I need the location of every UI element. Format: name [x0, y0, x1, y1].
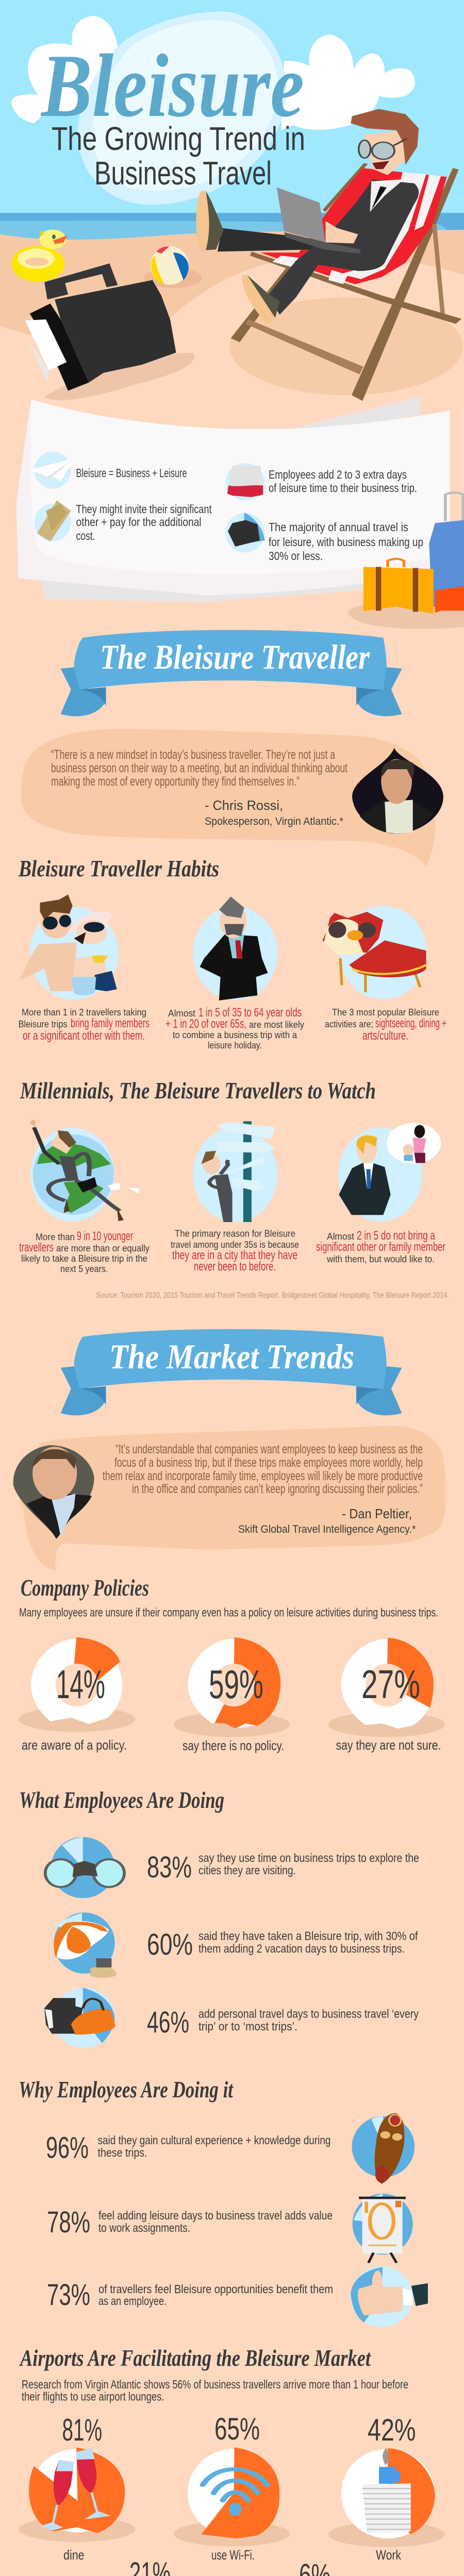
chart: 59% donut: say there is no policy. [183, 1738, 284, 1753]
stat: 46% with bags icon [44, 1988, 419, 2048]
text: habit 3: arts/culture. [362, 1029, 408, 1043]
panel: Chris Rossi quote [21, 729, 443, 867]
stat: 73% with thumbs up icon: 73% [47, 2278, 90, 2312]
text: millennial 2 [171, 1228, 299, 1274]
text: millennial 1: 9 in 10 younger [77, 1229, 133, 1243]
illustration: millennial figures [29, 1119, 441, 1222]
stat: 78% with presentation board icon [47, 2194, 413, 2263]
heading: What Employees Are Doing: What Employees Are Doing [19, 1787, 224, 1813]
heading: Bleisure Traveller Habits: Bleisure Traveller Habits [18, 855, 219, 882]
text: millennial 3: Almost [327, 1231, 354, 1242]
panel: bleisure definition paper: 30% or less. [269, 549, 323, 563]
stat: 73% with thumbs up icon: of travellers feel Bleisure opportunities benefit them [98, 2282, 333, 2296]
stat: 60% with umbrella icon: 60% [147, 1928, 193, 1961]
stat: 46% with bags icon: trip’ or to ‘most trips’. [198, 2020, 297, 2033]
stat: 83% with binoculars icon: 83% [147, 1851, 192, 1884]
text: habit 3: The 3 most popular Bleisure [332, 1007, 439, 1018]
text: millennial 2: travel among under 35s is because [171, 1240, 299, 1250]
banner: The Bleisure Traveller [61, 630, 402, 716]
text: habit 3 [325, 1007, 446, 1043]
heading: Why Employees Are Doing it: Why Employees Are Doing it [19, 2076, 234, 2103]
chart: 42% Work: Work [376, 2547, 402, 2563]
text: millennial 1: More than [36, 1232, 75, 1242]
stat: 78% with presentation board icon: 78% [47, 2206, 90, 2239]
panel: bleisure definition paper: They might invite their significant [76, 502, 212, 516]
text: habit 2: are most likely [249, 1020, 304, 1030]
panel: bleisure definition paper: for leisure, with business making up [269, 535, 423, 549]
text: millennial 1 [19, 1229, 150, 1274]
panel: bleisure definition paper: The majority of annual travel is [269, 520, 408, 534]
icon: luggage pile [347, 493, 464, 629]
stat: 96% with mask icon [46, 2113, 415, 2184]
chart: 27% donut [328, 1638, 445, 1753]
chart: 65% Wi-Fi: use Wi-Fi. [211, 2547, 255, 2563]
stat: 78% with presentation board icon: feel adding leisure days to business travel adds value [98, 2209, 333, 2222]
heading: Airports: Airports Are Facilitating the Bleisure Market [19, 2345, 371, 2371]
panel: Chris Rossi quote: - Chris Rossi, [205, 798, 283, 813]
stat: 78% with presentation board icon: to work assignments. [98, 2221, 190, 2234]
chart: 59% donut: 59% [209, 1662, 263, 1707]
stat: 73% with thumbs up icon: as an employee. [98, 2294, 167, 2308]
title: Bleisure [40, 36, 304, 135]
text: millennial 3: with them, but would like to. [326, 1254, 435, 1264]
chart: 81% dine: dine [63, 2547, 85, 2563]
text: airports intro [22, 2378, 408, 2403]
text: millennial 3: 2 in 5 do not bring a [357, 1229, 435, 1243]
chart: 27% donut: say they are not sure. [336, 1737, 441, 1753]
panel: bleisure definition paper [16, 397, 450, 602]
stat: 60% with umbrella icon: said they have taken a Bleisure trip, with 30% of [198, 1929, 418, 1942]
text: millennial 2: The primary reason for Bleisure [175, 1228, 295, 1239]
stat: 73% with thumbs up icon [47, 2266, 428, 2327]
text: millennial 1: next 5 years. [60, 1264, 108, 1274]
illustration: habit figures [19, 894, 427, 1001]
text: airports intro: their flights to use airport lounges. [22, 2389, 164, 2403]
stat: 46% with bags icon: 46% [147, 2006, 189, 2039]
chart: 42% Work: 42% [368, 2413, 416, 2447]
text: millennial 2: never been to before. [194, 1260, 276, 1274]
panel: Chris Rossi quote: business person on their way to a meeting, but an individual thinking about [51, 761, 347, 775]
text: habit 1: More than 1 in 2 travellers taking [22, 1007, 146, 1018]
stat: 83% with binoculars icon: say they use time on business trips to explore the [198, 1851, 419, 1865]
banner: The Bleisure Traveller: The Bleisure Traveller [100, 637, 370, 676]
title: Business Travel [94, 155, 272, 192]
text: habit 2: leisure holiday. [208, 1040, 262, 1050]
text: millennial 1: are more than or equally [56, 1243, 150, 1253]
panel: bleisure definition paper: cost. [76, 529, 95, 543]
panel: bleisure definition paper: Employees add 2 to 3 extra days [269, 468, 407, 481]
panel: bleisure definition paper: of leisure time to their business trip. [269, 481, 417, 495]
panel: Chris Rossi quote: making the most of every opportunity they find themselves in.” [51, 774, 300, 789]
chart: 14% donut [19, 1637, 135, 1753]
chart: 81% dine: 81% [62, 2413, 102, 2447]
text: habit 1: Bleisure trips [19, 1019, 68, 1029]
text: habit 2: + 1 in 20 of over 65s, [165, 1017, 246, 1031]
stat: 96% with mask icon: 96% [46, 2131, 89, 2165]
stat: 83% with binoculars icon [45, 1837, 419, 1898]
panel: Dan Peltier quote [13, 1426, 446, 1571]
text: habit 2: Almost [168, 1008, 195, 1019]
heading: Millennials: Millennials, The Bleisure Travellers to Watch [20, 1077, 376, 1104]
stat: 60% with umbrella icon [54, 1912, 418, 1978]
chart: 27% donut: 27% [361, 1662, 420, 1707]
panel: Dan Peltier quote: Skift Global Travel Intelligence Agency.* [238, 1523, 416, 1535]
banner: The Market Trends: The Market Trends [109, 1337, 354, 1376]
stat: 60% with umbrella icon: them adding 2 vacation days to business trips. [198, 1942, 405, 1955]
banner: The Market Trends [61, 1329, 402, 1415]
text: millennial 2: they are in a city that they have [172, 1248, 297, 1262]
text: millennial 3 [316, 1229, 445, 1264]
panel: Dan Peltier quote: - Dan Peltier, [342, 1506, 412, 1521]
text: habit 1: bring family members [71, 1016, 150, 1030]
panel: Chris Rossi quote: Spokesperson, Virgin Atlantic.* [205, 816, 343, 827]
title: The Growing Trend in [52, 120, 305, 157]
stat: 83% with binoculars icon: cities they are visiting. [198, 1863, 296, 1877]
text: habit 3: activities are; [325, 1019, 373, 1029]
text: habit 2 [165, 1006, 304, 1050]
chart: 65% Wi-Fi: 65% [214, 2412, 260, 2446]
chart: 65% Wi-Fi [173, 2412, 290, 2563]
chart: 14% donut: are aware of a policy. [22, 1737, 127, 1753]
text: millennial 1: likely to take a Bleisure trip in the [21, 1253, 147, 1264]
chart: 14% donut: 14% [56, 1662, 105, 1707]
text: habit 2: 1 in 5 of 35 to 64 year olds [198, 1006, 302, 1020]
text: millennial 1: travellers [19, 1241, 54, 1255]
text: habit 2: to combine a business trip with a [173, 1030, 297, 1040]
stat: 46% with bags icon: add personal travel days to business travel ‘every [198, 2007, 419, 2021]
text: habit 1: or a significant other with them. [23, 1029, 145, 1043]
panel: bleisure definition paper: Bleisure = Business + Leisure [76, 466, 187, 480]
panel: Chris Rossi quote: “There is a new mindset in today’s business traveller. They’re not just a [51, 748, 335, 762]
chart: 42% Work [328, 2413, 445, 2563]
heading: Company Policies: Company Policies [21, 1574, 149, 1601]
chart: 59% donut [173, 1637, 290, 1753]
panel: bleisure definition paper: other + pay for the additional [76, 515, 201, 529]
hero beach illustration [0, 0, 464, 438]
text: habit 1 [19, 1007, 150, 1043]
chart: 81% dine [19, 2413, 135, 2563]
stat: 96% with mask icon: these trips. [98, 2146, 147, 2159]
stat: 96% with mask icon: said they gain cultural experience + knowledge during [98, 2133, 331, 2147]
title [40, 36, 305, 192]
